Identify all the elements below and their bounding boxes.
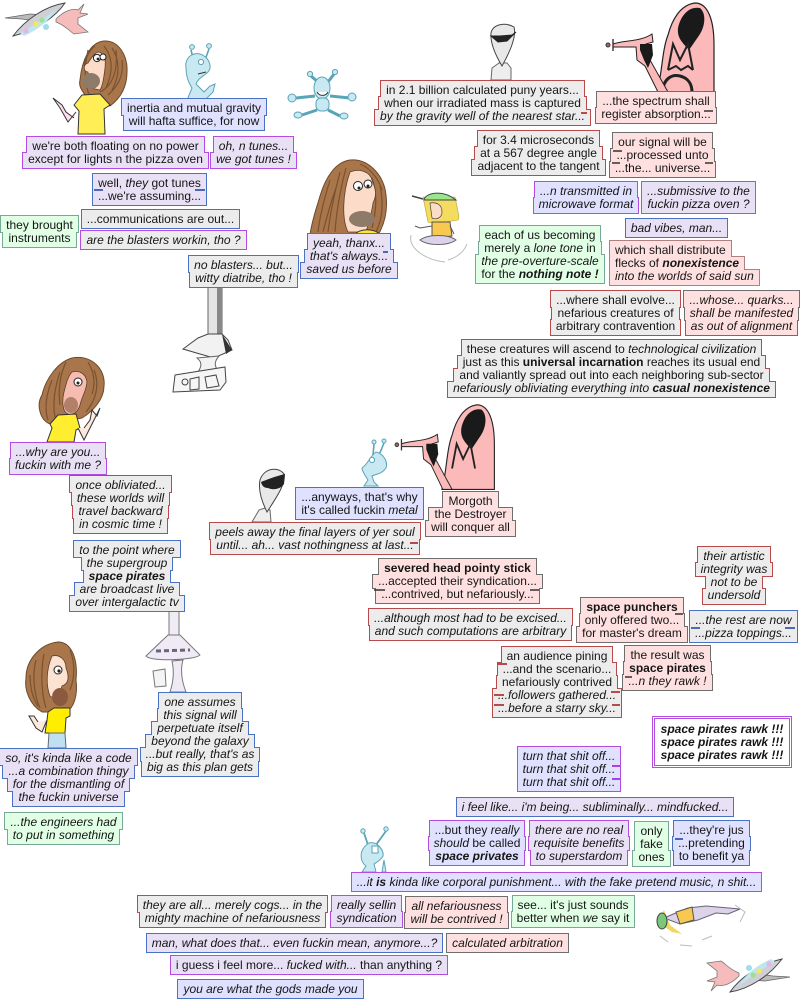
bubble: turn that shit off [517, 746, 621, 792]
bubble: peels away: until... ah... vast nothingness at last... [216, 538, 414, 552]
bubble: technological civilization: and valiantly spread out into each neighboring sub-sector [459, 368, 764, 382]
bubble: where shall evolve: nefarious creatures of [557, 306, 674, 320]
bubble: technological civilization: just as this universal incarnation reaches its usual end [463, 355, 760, 369]
bubble: pretending: ...they're jus [679, 823, 744, 837]
bubble: technological civilization: these creatures will ascend to technological civilization [467, 342, 756, 356]
bubble: fucked with: i guess i feel more... fucked with... than anything ? [176, 958, 442, 972]
bubble: our signal: our signal will be [618, 135, 707, 149]
icon: long-haired guy explaining [26, 642, 77, 748]
bubble: yeah thanx: saved us before [306, 262, 392, 276]
bubble: yeah thanx: yeah, thanx... [313, 236, 385, 250]
bubble: once obliviated: travel backward [78, 504, 163, 518]
bubble: once obliviated: these worlds will [77, 491, 164, 505]
bubble: whose quarks [683, 290, 800, 336]
bubble: technological civilization: nefariously obliviating everything into casual nonexistence [453, 381, 770, 395]
bubble: inertia: inertia and mutual gravity [127, 101, 261, 115]
bubble: pizza toppings [689, 610, 798, 643]
bubble: 3.4 microseconds: for 3.4 microseconds [483, 133, 594, 147]
bubble: audience pining [492, 646, 622, 718]
bubble: one assumes: ...but really, that's as [146, 747, 254, 761]
bubble: although: and such computations are arbitrary [375, 624, 566, 638]
bubble: yeah thanx [300, 233, 398, 279]
bubble: lone tone: the pre-overture-scale [481, 254, 599, 268]
bubble: combination thingy [1, 749, 136, 806]
icon: kid flying horizontally [657, 905, 745, 946]
bubble: one assumes: perpetuate itself [157, 721, 243, 735]
bubble: space privates: space privates [435, 849, 519, 863]
bubble: the engineers: ...the engineers had [10, 815, 117, 829]
bubble: they brought instruments [0, 215, 79, 248]
bubble: spectrum: register absorption... [601, 107, 711, 121]
bubble: they brought instruments: instruments [8, 231, 71, 245]
bubble: supergroup: over intergalactic tv [75, 595, 179, 609]
bubble: audience pining: ...followers gathered... [498, 688, 616, 702]
bubble: inertia [121, 98, 267, 131]
bubble: anyways: it's called fuckin metal [301, 503, 418, 517]
bubble: space punchers: only offered two... [585, 613, 679, 627]
bubble: pretending: ...pretending [678, 836, 745, 850]
bubble: the engineers [6, 813, 121, 844]
bubble: all nefariousness: all nefariousness [411, 899, 502, 913]
bubble: anyways: ...anyways, that's why [301, 490, 418, 504]
bubble: turn that shit off: turn that shit off... [523, 749, 615, 763]
bubble: technological civilization [447, 339, 776, 398]
bubble: floating on no power [22, 136, 209, 169]
bubble: although: ...although most had to be excised... [374, 611, 567, 625]
icon: grey alien with sunglasses smaller [252, 469, 285, 522]
bubble: one assumes: this signal will [163, 708, 237, 722]
bubble: why are you: fuckin with me ? [15, 458, 101, 472]
icon: long-haired guy pointing [53, 41, 127, 134]
bubble: submissive: fuckin pizza oven ? [647, 197, 750, 211]
bubble: morgoth the destroyer [425, 491, 516, 537]
bubble: our signal [609, 132, 716, 178]
bubble: combination thingy: the fuckin universe [18, 790, 119, 804]
bubble: space pirates rawk: space pirates rawk !!! [661, 722, 783, 736]
bubble: supergroup: to the point where [79, 543, 175, 557]
bubble: really sellin: syndication [336, 911, 397, 925]
bubble: no real requisite benefits: to superstardom [536, 849, 622, 863]
bubble: audience pining: nefariously contrived [502, 675, 612, 689]
bubble: only fake ones: fake [640, 837, 663, 851]
bubble: floating on no power: except for lights n the pizza oven [28, 152, 203, 166]
bubble: pizza toppings: ...pizza toppings... [695, 626, 792, 640]
bubble: supergroup: the supergroup [87, 556, 167, 570]
bubble: artistic integrity: integrity was [701, 562, 767, 576]
bubble: space pirates rawk: space pirates rawk !!! [661, 735, 783, 749]
icon: lavender ufo tower [146, 610, 200, 692]
icon: spaceship bottom right [707, 959, 790, 992]
icon: spaceship top left [5, 3, 88, 36]
bubble: really sellin: really sellin [337, 898, 396, 912]
bubble: combination thingy: so, it's kinda like a code [5, 751, 132, 765]
bubble: artistic integrity: their artistic [703, 549, 765, 563]
bubble: 2.1 billion years: when our irradiated mass is captured [384, 96, 581, 110]
bubble: space pirates rawk: space pirates rawk !!! [661, 748, 783, 762]
bubble: combination thingy: for the dismantling of [13, 777, 124, 791]
bubble: audience pining: ...and the scenario... [503, 662, 611, 676]
icon: morgoth with pointy stick [606, 3, 714, 92]
bubble: no blasters: witty diatribe, tho ! [195, 271, 292, 285]
bubble: only fake ones: only [640, 824, 662, 838]
icon: morgoth the destroyer [395, 405, 494, 489]
bubble: turn that shit off: turn that shit off... [523, 775, 615, 789]
bubble: they got tunes: ...we're assuming... [98, 189, 201, 203]
bubble: which shall distribute: which shall distribute [615, 243, 726, 257]
icon: blue alien small [362, 439, 387, 486]
bubble: artistic integrity: undersold [708, 588, 760, 602]
bubble: artistic integrity [695, 546, 773, 605]
bubble: peels away [209, 522, 421, 555]
bubble: our signal: ...processed unto [616, 148, 709, 162]
bubble: severed head pointy stick: ...contrived, but nefariously... [381, 587, 534, 601]
bubble: peels away: peels away the final layers of yer soul [215, 525, 415, 539]
bubble: the result: ...n they rawk ! [628, 674, 707, 688]
bubble: spectrum: ...the spectrum shall [602, 94, 710, 108]
bubble: space punchers: space punchers [586, 600, 678, 614]
bubble: only fake ones [632, 821, 671, 867]
bubble: the result: space pirates [629, 661, 706, 675]
bubble: 3.4 microseconds: adjacent to the tangent [477, 159, 600, 173]
bubble: supergroup: space pirates [89, 569, 165, 583]
bubble: oh n tunes [210, 136, 297, 169]
bubble: our signal: ...the... universe... [615, 161, 710, 175]
bubble: see: see... it's just sounds [518, 898, 629, 912]
bubble: whose quarks: shall be manifested [690, 306, 793, 320]
bubble: calculated arbitration: calculated arbitration [452, 936, 563, 950]
bubble: one assumes [142, 693, 258, 776]
bubble: one assumes: beyond the galaxy [151, 734, 249, 748]
bubble: the result: the result was [630, 648, 705, 662]
bubble: 2.1 billion years: by the gravity well of the nearest star... [380, 109, 585, 123]
bubble: space privates: should be called [434, 836, 520, 850]
bubble: they got tunes [92, 173, 207, 206]
bubble: microwave format: ...n transmitted in [540, 184, 632, 198]
bubble: space punchers [576, 597, 688, 643]
bubble: see [513, 896, 633, 927]
bubble: corporal punishment: ...it is kinda like corporal punishment... with the fake pretend music, n shit... [357, 875, 756, 889]
bubble: oh n tunes: oh, n tunes... [219, 139, 288, 153]
bubble: audience pining: an audience pining [507, 649, 607, 663]
bubble: they got tunes: well, they got tunes [98, 176, 201, 190]
bubble: lone tone [475, 225, 605, 284]
bubble: inertia: will hafta suffice, for now [129, 114, 259, 128]
icon: ufo podium with pole [173, 284, 232, 392]
bubble: where shall evolve: ...where shall evolve... [556, 293, 675, 307]
bubble: pretending [675, 821, 748, 865]
bubble: submissive [641, 181, 756, 214]
bubble: all nefariousness [407, 897, 506, 928]
bubble: bad vibes: bad vibes, man... [631, 221, 722, 235]
bubble: which shall distribute: flecks of nonexistence [615, 256, 739, 270]
icon: blue alien waving [186, 44, 215, 100]
bubble: yeah thanx: that's always... [310, 249, 388, 263]
bubble: see: better when we say it [517, 911, 629, 925]
bubble: supergroup [69, 540, 185, 612]
bubble: although [368, 608, 573, 641]
bubble: mindfucked: i feel like... i'm being... subliminally... mindfucked... [462, 800, 728, 814]
bubble: 3.4 microseconds [471, 130, 606, 176]
icon: long-haired guy looking down [310, 160, 387, 235]
bubble: no real requisite benefits [528, 820, 630, 866]
bubble: which shall distribute: into the worlds of said sun [615, 269, 754, 283]
bubble: lone tone: each of us becoming [485, 228, 595, 242]
bubble: once obliviated: in cosmic time ! [79, 517, 162, 531]
bubble: combination thingy: ...a combination thingy [8, 764, 129, 778]
bubble: microwave format: microwave format [539, 197, 633, 211]
bubble: anyways [295, 487, 424, 520]
bubble: 2.1 billion years [374, 80, 591, 126]
icon: blue alien at bottom [361, 827, 388, 872]
bubble: once obliviated [69, 475, 172, 534]
bubble: no blasters [188, 255, 299, 288]
bubble: space privates: ...but they really [435, 823, 519, 837]
bubble: audience pining: ...before a starry sky... [498, 701, 616, 715]
bubble: lone tone: merely a lone tone in [484, 241, 596, 255]
bubble: really sellin [332, 896, 401, 927]
bubble: what does that mean: man, what does that... even fuckin mean, anymore...? [152, 936, 437, 950]
bubble: no real requisite benefits: there are no real [535, 823, 623, 837]
bubble: one assumes: big as this plan gets [147, 760, 253, 774]
bubble: one assumes: one assumes [164, 695, 236, 709]
bubble: where shall evolve: arbitrary contravention [556, 319, 675, 333]
bubble: morgoth the destroyer: will conquer all [431, 520, 510, 534]
bubble: they brought instruments: they brought [6, 218, 73, 232]
bubble: spectrum [595, 91, 717, 124]
bubble: why are you: ...why are you... [16, 445, 100, 459]
bubble: space pirates rawk [652, 716, 792, 768]
bubble: communications: ...communications are out... [87, 212, 234, 226]
bubble: turn that shit off: turn that shit off... [523, 762, 615, 776]
bubble: microwave format [533, 181, 639, 214]
bubble: whose quarks: as out of alignment [691, 319, 792, 333]
bubble: cogs: mighty machine of nefariousness [145, 911, 320, 925]
bubble: the result [622, 645, 713, 691]
bubble: why are you [9, 442, 107, 475]
bubble: no real requisite benefits: requisite benefits [534, 836, 624, 850]
bubble: 2.1 billion years: in 2.1 billion calculated puny years... [386, 83, 579, 97]
bubble: only fake ones: ones [638, 850, 665, 864]
icon: grey alien with sunglasses [491, 24, 516, 80]
bubble: you are what the gods made you: you are what the gods made you [183, 982, 358, 996]
bubble: oh n tunes: we got tunes ! [216, 152, 291, 166]
bubble: severed head pointy stick: ...accepted their syndication... [378, 574, 537, 588]
bubble: no blasters: no blasters... but... [194, 258, 293, 272]
bubble: cogs: they are all... merely cogs... in the [143, 898, 322, 912]
bubble: the engineers: to put in something [13, 828, 114, 842]
bubble: cogs [139, 896, 326, 927]
bubble: space punchers: for master's dream [582, 626, 682, 640]
bubble: lone tone: for the nothing note ! [481, 267, 599, 281]
icon: long-haired guy with peace sign [39, 357, 104, 442]
bubble: morgoth the destroyer: the Destroyer [434, 507, 507, 521]
bubble: 3.4 microseconds: at a 567 degree angle [480, 146, 597, 160]
bubble: floating on no power: we're both floating on no power [32, 139, 199, 153]
bubble: morgoth the destroyer: Morgoth [448, 494, 493, 508]
bubble: severed head pointy stick [372, 558, 543, 604]
bubble: pizza toppings: ...the rest are now [695, 613, 792, 627]
icon: kid meditating on green cap [411, 193, 467, 262]
bubble: supergroup: are broadcast live [80, 582, 174, 596]
bubble: space privates [428, 820, 526, 866]
bubble: blasters: are the blasters workin, tho ? [86, 233, 241, 247]
bubble: whose quarks: ...whose... quarks... [689, 293, 794, 307]
bubble: all nefariousness: will be contrived ! [410, 912, 503, 926]
bubble: which shall distribute [609, 240, 760, 286]
bubble: where shall evolve [550, 290, 681, 336]
bubble: submissive: ...submissive to the [647, 184, 750, 198]
bubble: severed head pointy stick: severed head pointy stick [384, 561, 531, 575]
icon: blue alien jumping [288, 69, 356, 119]
bubble: pretending: to benefit ya [679, 849, 744, 863]
bubble: once obliviated: once obliviated... [75, 478, 166, 492]
bubble: artistic integrity: not to be [711, 575, 757, 589]
